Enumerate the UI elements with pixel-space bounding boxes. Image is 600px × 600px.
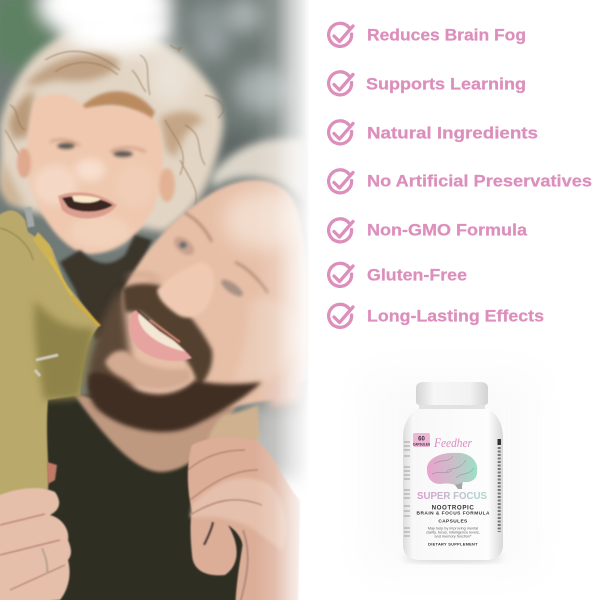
backdrop haze xyxy=(360,370,540,575)
child mouth xyxy=(58,192,117,218)
brain logo xyxy=(427,453,477,489)
item: Natural Ingredients xyxy=(329,121,538,144)
item: Non-GMO Formula xyxy=(329,219,528,242)
item: Gluten-Free: Gluten-Free xyxy=(367,266,467,284)
bottle body xyxy=(403,408,503,560)
item: No Artificial Preservatives xyxy=(329,170,592,193)
bottle shadow xyxy=(403,554,503,562)
item: No Artificial Preservatives: No Artificial Preservatives xyxy=(367,172,592,190)
jacket collar on shoulder xyxy=(208,404,261,442)
brand name: Feedher xyxy=(433,435,473,450)
item: Supports Learning xyxy=(329,72,526,95)
photo background foliage xyxy=(0,0,330,480)
product description: and memory function* xyxy=(435,534,472,538)
supplement facts panel xyxy=(498,439,501,532)
child's undershirt xyxy=(60,235,152,340)
capsule count badge: CAPSULES xyxy=(413,442,430,446)
child's jacket xyxy=(0,207,100,498)
product description: clarity, focus, intelligence levels, xyxy=(426,530,480,534)
benefits checklist xyxy=(329,23,592,327)
father's neck xyxy=(72,392,240,472)
product bottle xyxy=(360,370,540,575)
capsule count badge: 60 xyxy=(418,436,425,442)
father's mouth xyxy=(129,310,192,361)
product description: DIETARY SUPPLEMENT xyxy=(428,542,478,546)
father's left hand with ring xyxy=(0,462,71,600)
father's shirt xyxy=(40,395,250,600)
item: Natural Ingredients: Natural Ingredients xyxy=(367,124,538,142)
father's right hand xyxy=(188,438,300,600)
product name: SUPER FOCUS xyxy=(417,490,487,502)
white fade over photo edge xyxy=(262,0,309,600)
product description: NOOTROPIC xyxy=(432,504,474,512)
left side label text xyxy=(404,442,411,536)
item: Reduces Brain Fog: Reduces Brain Fog xyxy=(367,26,526,44)
product description xyxy=(416,504,490,546)
product description: May help by improving mental xyxy=(428,526,478,530)
child hair xyxy=(0,6,224,232)
item: Non-GMO Formula: Non-GMO Formula xyxy=(367,220,528,240)
father's head xyxy=(118,134,306,411)
father's nose xyxy=(157,262,214,318)
bottle cap xyxy=(416,382,488,409)
product description: CAPSULES xyxy=(438,518,468,524)
child face xyxy=(17,94,175,254)
item: Long-Lasting Effects xyxy=(329,304,544,327)
product description: BRAIN & FOCUS FORMULA xyxy=(416,510,490,516)
photo: father and child xyxy=(0,0,330,600)
father's beard xyxy=(87,284,262,432)
item: Reduces Brain Fog xyxy=(329,23,526,46)
item: Long-Lasting Effects: Long-Lasting Effects xyxy=(367,306,544,326)
item: Gluten-Free xyxy=(329,263,467,286)
capsule count badge xyxy=(413,433,430,447)
item: Supports Learning: Supports Learning xyxy=(366,74,526,94)
